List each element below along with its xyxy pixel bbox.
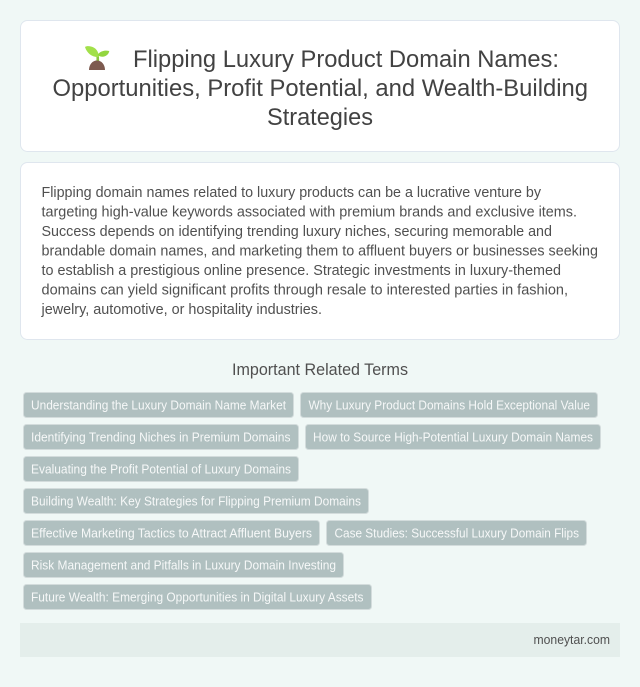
icon: sprout — [85, 46, 109, 70]
paragraph text: jewelry, automotive, or hospitality industries. — [41, 302, 322, 318]
tag: future wealth — [24, 584, 372, 610]
heading: important related terms: Important Related Terms — [232, 361, 408, 379]
paragraph text — [41, 185, 598, 318]
title text: Strategies — [267, 104, 373, 131]
paragraph text: domains can yield significant profits through resale to interested parties in fashion, — [42, 282, 568, 298]
footer bar — [20, 623, 620, 657]
title text — [52, 46, 588, 131]
tag: marketing tactics: Effective Marketing Tactics to Attract Affluent Buyers — [31, 526, 312, 540]
tag: case studies: Case Studies: Successful Luxury Domain Flips — [334, 526, 579, 540]
paragraph text: to establish a prestigious online presence. Strategic investments in luxury-themed — [42, 263, 561, 279]
tag: sourcing domains: How to Source High-Potential Luxury Domain Names — [313, 430, 593, 444]
tag: profit potential — [24, 456, 298, 482]
paragraph text: Flipping domain names related to luxury products can be a lucrative venture by — [42, 185, 542, 201]
panel: intro paragraph — [20, 162, 620, 340]
tag: sourcing domains — [306, 424, 600, 450]
tag: marketing tactics — [24, 520, 320, 546]
footer bar: moneytar.com — [534, 633, 610, 647]
tag: trending niches — [24, 424, 298, 450]
paragraph text: Success depends on identifying trending luxury niches, securing memorable and — [42, 224, 552, 240]
tag: risk management: Risk Management and Pitfalls in Luxury Domain Investing — [31, 558, 336, 572]
tag: exceptional value — [300, 392, 598, 418]
panel: title card — [20, 20, 620, 152]
tag: understanding the market — [24, 392, 294, 418]
tag list — [24, 392, 600, 610]
tag: future wealth: Future Wealth: Emerging Opportunities in Digital Luxury Assets — [31, 590, 364, 604]
paragraph text: brandable domain names, and marketing them to affluent buyers or businesses seeking — [42, 244, 598, 260]
title text: Opportunities, Profit Potential, and Wealth-Building — [52, 75, 588, 102]
tag: profit potential: Evaluating the Profit Potential of Luxury Domains — [31, 462, 291, 476]
title text: Flipping Luxury Product Domain Names: — [133, 46, 559, 73]
tag: risk management — [24, 552, 344, 578]
paragraph text: targeting high-value keywords associated with premium brands and exclusive items. — [42, 204, 577, 220]
tag: building wealth — [24, 488, 368, 514]
tag: trending niches: Identifying Trending Niches in Premium Domains — [31, 430, 290, 444]
tag: case studies — [326, 520, 586, 546]
tag: understanding the market: Understanding the Luxury Domain Name Market — [31, 398, 286, 412]
tag: exceptional value: Why Luxury Product Domains Hold Exceptional Value — [308, 398, 590, 412]
tag: building wealth: Building Wealth: Key Strategies for Flipping Premium Domains — [31, 494, 361, 508]
